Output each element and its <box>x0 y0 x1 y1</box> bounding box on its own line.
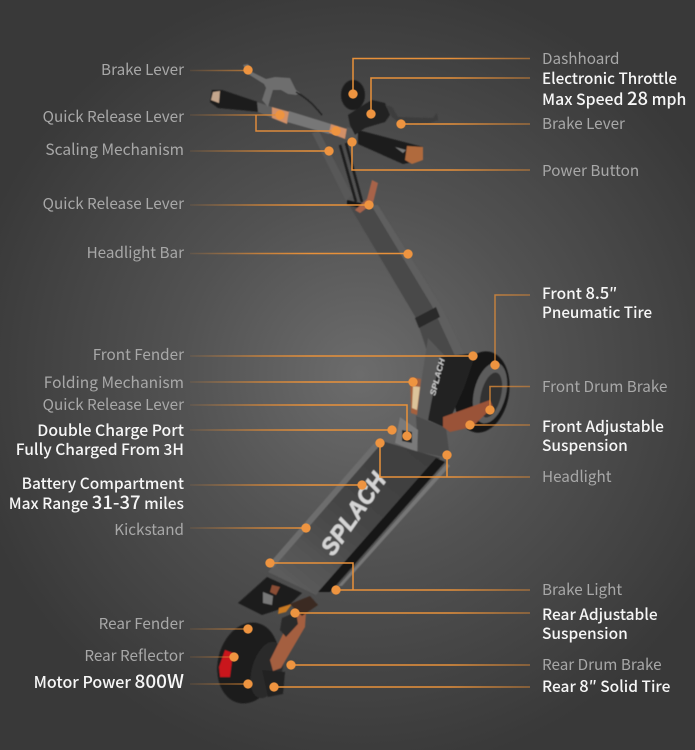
right labels: Rear Drum Brake <box>542 653 662 675</box>
rear wheel <box>209 616 289 710</box>
deck black band <box>318 458 445 592</box>
right labels: Suspension <box>542 622 628 644</box>
left labels: Headlight Bar <box>87 241 184 263</box>
left labels: Quick Release Lever <box>43 393 184 415</box>
callout dots <box>230 66 500 692</box>
callout lines <box>190 58 530 687</box>
right labels: Electronic Throttle <box>542 67 677 89</box>
right labels: Power Button <box>542 159 639 181</box>
front fork plate <box>416 338 445 422</box>
right labels: Pneumatic Tire <box>542 301 652 323</box>
left labels: Kickstand <box>114 518 184 540</box>
right labels: Brake Light <box>542 578 622 600</box>
left labels: Max Range 31-37 miles <box>9 489 184 515</box>
front suspension <box>443 400 493 432</box>
front tire <box>448 347 516 437</box>
left labels: Rear Fender <box>99 612 184 634</box>
right brake lever <box>385 105 438 125</box>
left labels: Front Fender <box>93 343 184 365</box>
left labels: Double Charge Port <box>37 418 184 441</box>
stem <box>312 131 465 360</box>
left labels: Folding Mechanism <box>44 371 184 393</box>
right labels: Front Drum Brake <box>542 375 667 397</box>
fork logo: SPLACH <box>428 357 447 397</box>
deck <box>267 440 450 595</box>
right labels: Rear Adjustable <box>542 603 658 625</box>
left labels: Scaling Mechanism <box>45 138 184 160</box>
folding mechanism <box>410 377 421 415</box>
left labels: Battery Compartment <box>22 472 184 494</box>
right labels <box>542 47 686 697</box>
right labels: Dashhoard <box>542 47 620 69</box>
lower fork body <box>416 416 450 458</box>
logo: SPLACH <box>316 467 392 560</box>
left labels: Brake Lever <box>101 58 184 80</box>
dashboard <box>341 80 365 110</box>
left labels: Fully Charged From 3H <box>16 438 184 460</box>
right labels: Front Adjustable <box>542 415 664 437</box>
right labels: Front 8.5″ <box>542 280 617 304</box>
left labels: Motor Power 800W <box>34 667 184 694</box>
right labels: Rear 8″ Solid Tire <box>542 673 671 697</box>
right labels: Max Speed 28 mph <box>542 85 686 111</box>
rear reflector <box>219 650 233 677</box>
scooter illustration <box>209 64 516 710</box>
rear suspension <box>270 606 306 671</box>
charge port housing <box>395 417 418 452</box>
right labels: Headlight <box>542 465 612 487</box>
left brake lever <box>243 64 300 107</box>
quick release clamp <box>355 180 378 213</box>
left labels: Rear Reflector <box>84 644 184 666</box>
right labels: Brake Lever <box>542 112 625 134</box>
throttle cluster <box>348 100 390 135</box>
deck light strip <box>267 441 381 568</box>
fender <box>428 353 476 428</box>
left labels: Quick Release Lever <box>43 192 184 214</box>
handlebar <box>210 90 423 164</box>
brake cable <box>296 92 322 115</box>
left labels: Quick Release Lever <box>43 105 184 127</box>
left labels <box>9 58 184 694</box>
right labels: Suspension <box>542 434 628 456</box>
rear deck plate <box>238 577 302 615</box>
